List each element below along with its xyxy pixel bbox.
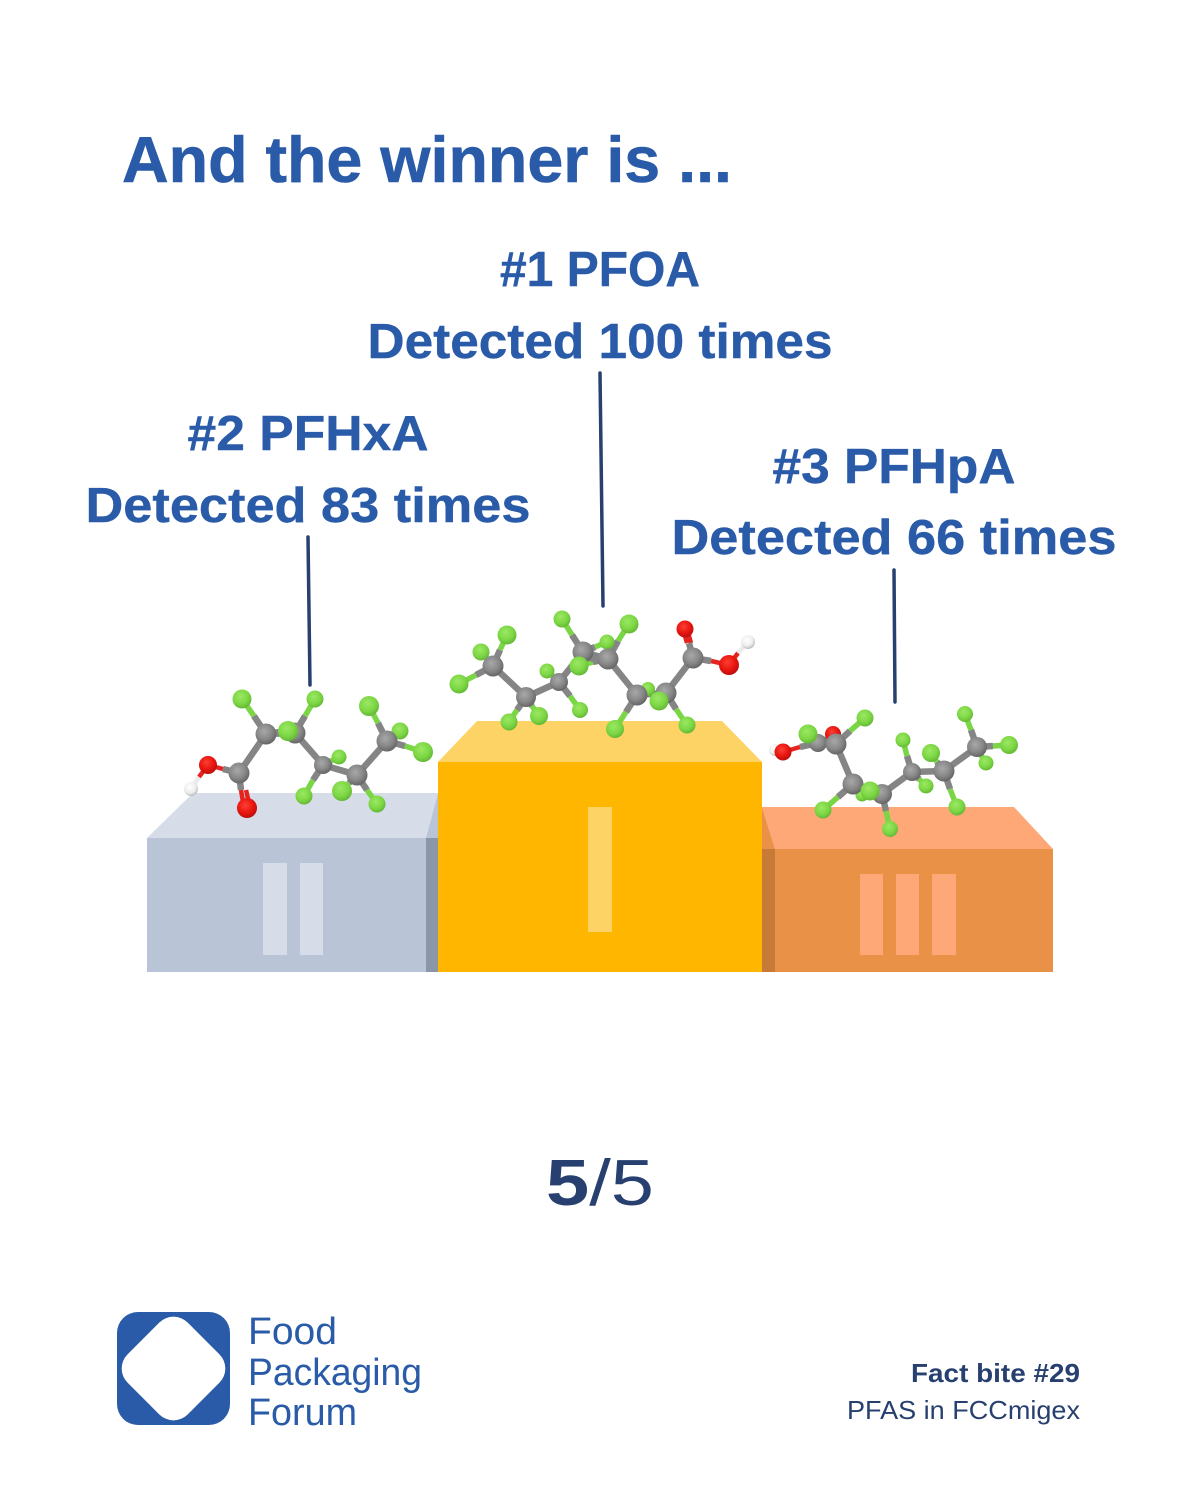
leader line: second place: [308, 537, 310, 685]
label: second place PFHxA: [86, 407, 530, 533]
label: second place PFHxA: #2 PFHxA: [188, 407, 428, 461]
logo wordmark: Food: [248, 1311, 337, 1353]
podium: third place: [762, 807, 1053, 972]
molecule: PFHxA: [184, 690, 433, 818]
logo wordmark: [248, 1311, 422, 1434]
label: first place PFOA: [368, 243, 832, 369]
logo mark: [113, 1308, 234, 1429]
footer: fact bite: [847, 1358, 1080, 1425]
label: first place PFOA: Detected 100 times: [368, 315, 832, 369]
footer: fact bite: PFAS in FCCmigex: [847, 1395, 1080, 1425]
logo wordmark: Forum: [248, 1392, 357, 1434]
label: first place PFOA: #1 PFOA: [500, 243, 700, 297]
molecule: PFOA: [450, 610, 755, 738]
page counter: 5/5: [546, 1146, 654, 1219]
leader line: first place: [600, 373, 603, 606]
label: second place PFHxA: Detected 83 times: [86, 479, 530, 533]
label: third place PFHpA: #3 PFHpA: [772, 440, 1016, 494]
leader line: third place: [894, 570, 895, 702]
footer: fact bite: Fact bite #29: [911, 1358, 1080, 1388]
label: third place PFHpA: [672, 440, 1116, 565]
podium: first place: [438, 721, 762, 972]
title: And the winner is ...: [122, 123, 732, 196]
logo wordmark: Packaging: [248, 1352, 422, 1394]
logo: Food Packaging Forum: [113, 1308, 422, 1434]
podium: second place: [147, 793, 438, 972]
label: third place PFHpA: Detected 66 times: [672, 511, 1116, 565]
molecule: PFHpA: [769, 706, 1018, 837]
